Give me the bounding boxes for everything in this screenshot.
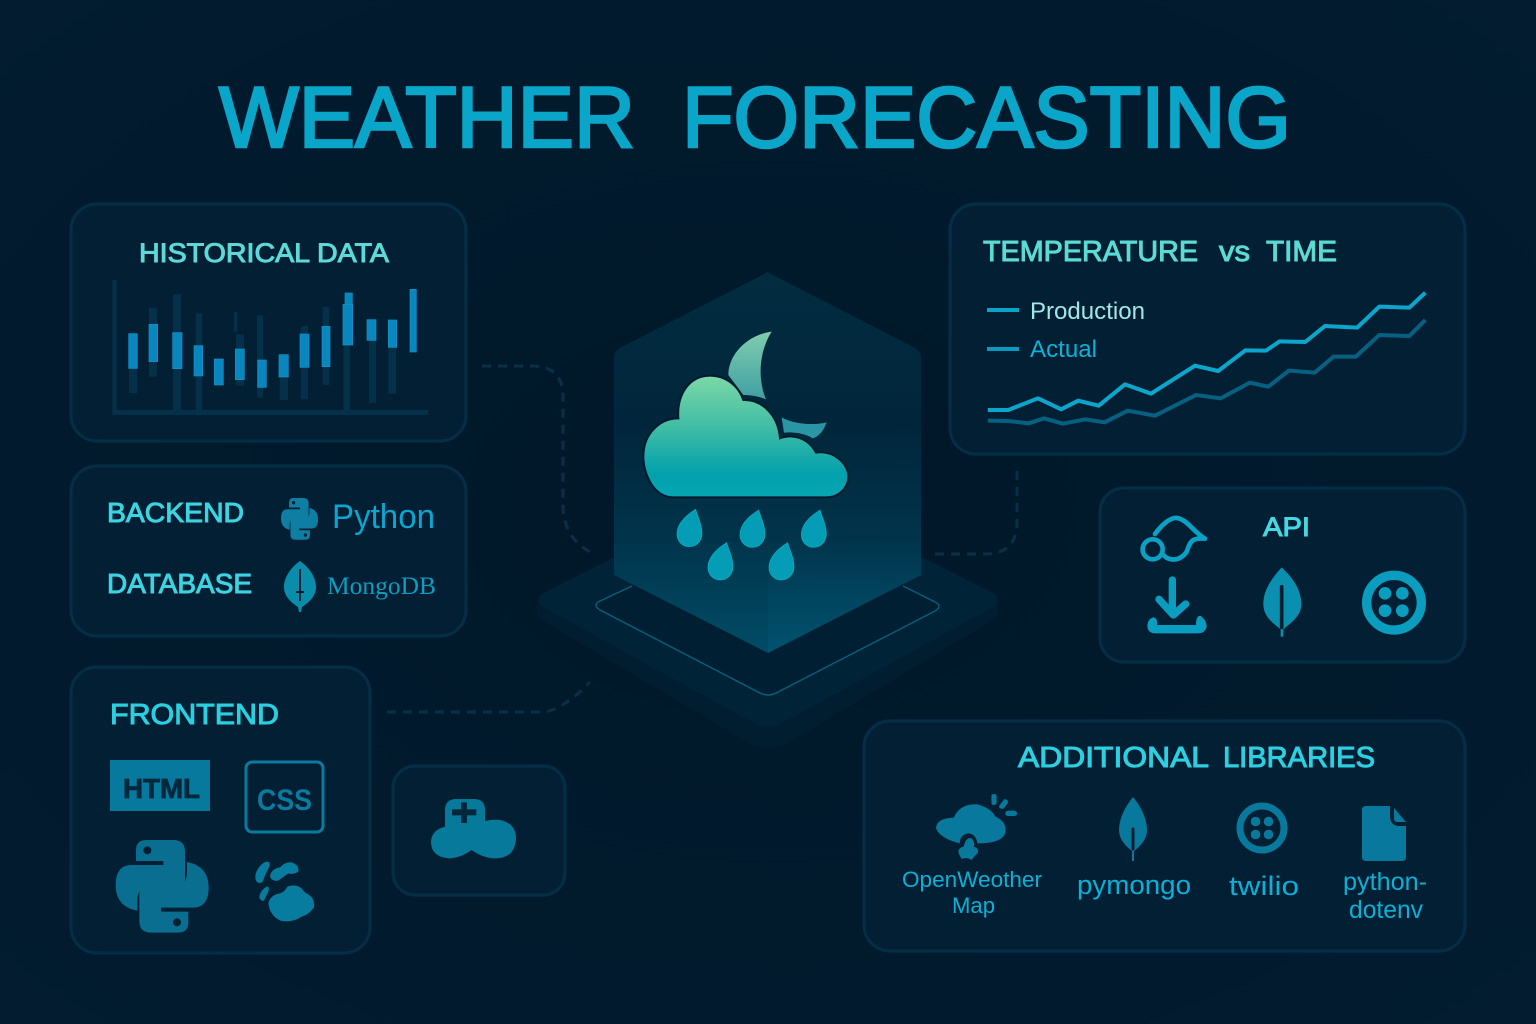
icon: python small — [281, 498, 318, 540]
panel: additional libraries — [864, 721, 1465, 951]
label: python-dotenv: dotenv — [1349, 896, 1423, 924]
panel: historical data — [71, 204, 466, 441]
icon: download — [1147, 580, 1207, 633]
panel: temperature vs time — [950, 204, 1465, 454]
title: WEATHER — [219, 70, 635, 166]
label: database: DATABASE — [107, 568, 252, 599]
candlestick chart — [112, 280, 428, 415]
cube right face — [767, 272, 921, 653]
heading: temperature vs time: TIME — [1266, 236, 1337, 268]
heading: frontend: FRONTEND — [110, 699, 279, 731]
panel: api — [1100, 488, 1465, 662]
title — [219, 70, 1291, 166]
icon: pymongo leaf — [1119, 797, 1147, 861]
icon: html badge: HTML — [123, 773, 200, 804]
label: pymongo: pymongo — [1077, 870, 1191, 900]
cube left face — [614, 272, 768, 653]
icon: openweathermap cloud — [936, 794, 1017, 860]
icon: cloud with plus — [431, 799, 516, 858]
rain drops — [677, 509, 826, 580]
platform base — [537, 483, 998, 748]
connector: historical data to centre — [482, 366, 592, 553]
legend: actual — [987, 336, 1097, 363]
icon: html badge — [110, 760, 210, 811]
central illustration: weather cube — [537, 272, 998, 748]
panel: health cloud tile — [393, 766, 565, 895]
icon: twilio small — [1240, 806, 1284, 850]
weather icon — [643, 332, 848, 580]
label: backend: BACKEND — [107, 497, 244, 528]
icon: world blobs — [255, 862, 314, 921]
icon: leaf — [1263, 567, 1301, 637]
connector: frontend to centre — [387, 682, 590, 712]
legend: production: Production — [1030, 298, 1145, 325]
label: python: Python — [332, 498, 435, 536]
heading: temperature vs time — [983, 236, 1337, 268]
line chart — [988, 293, 1425, 424]
icon: mongodb leaf small — [284, 561, 316, 612]
platform top — [538, 480, 998, 726]
heading: temperature vs time: vs — [1219, 236, 1250, 268]
icon: css badge — [246, 762, 323, 832]
heading: api: API — [1263, 512, 1310, 542]
moon crescent — [728, 332, 772, 399]
icon: python large — [116, 840, 209, 933]
label: openweathermap — [902, 867, 1042, 918]
label: mongodb: MongoDB — [327, 573, 436, 600]
label: openweathermap: Map — [952, 893, 995, 918]
icon: document — [1362, 806, 1406, 861]
cloud — [643, 376, 848, 497]
heading: additional libraries — [1018, 742, 1375, 774]
platform inner outline — [596, 586, 939, 695]
label: python-dotenv — [1343, 868, 1427, 924]
title: FORECASTING — [682, 70, 1291, 166]
panel: frontend — [71, 667, 370, 953]
icon: css badge: CSS — [257, 784, 312, 817]
label: twilio: twilio — [1229, 871, 1299, 901]
heading: additional libraries: LIBRARIES — [1223, 742, 1375, 774]
icon: twilio — [1367, 575, 1421, 630]
moon lower part — [782, 417, 827, 438]
label: openweathermap: OpenWeother — [902, 867, 1042, 892]
icon: api link — [1143, 518, 1205, 559]
label: python-dotenv: python- — [1343, 868, 1427, 896]
heading: historical data: HISTORICAL DATA — [139, 238, 389, 268]
legend: actual: Actual — [1030, 336, 1097, 363]
heading: temperature vs time: TEMPERATURE — [983, 236, 1198, 268]
heading: additional libraries: ADDITIONAL — [1018, 742, 1209, 774]
panel: backend and database — [71, 466, 466, 636]
connector: temperature to centre — [935, 465, 1017, 554]
